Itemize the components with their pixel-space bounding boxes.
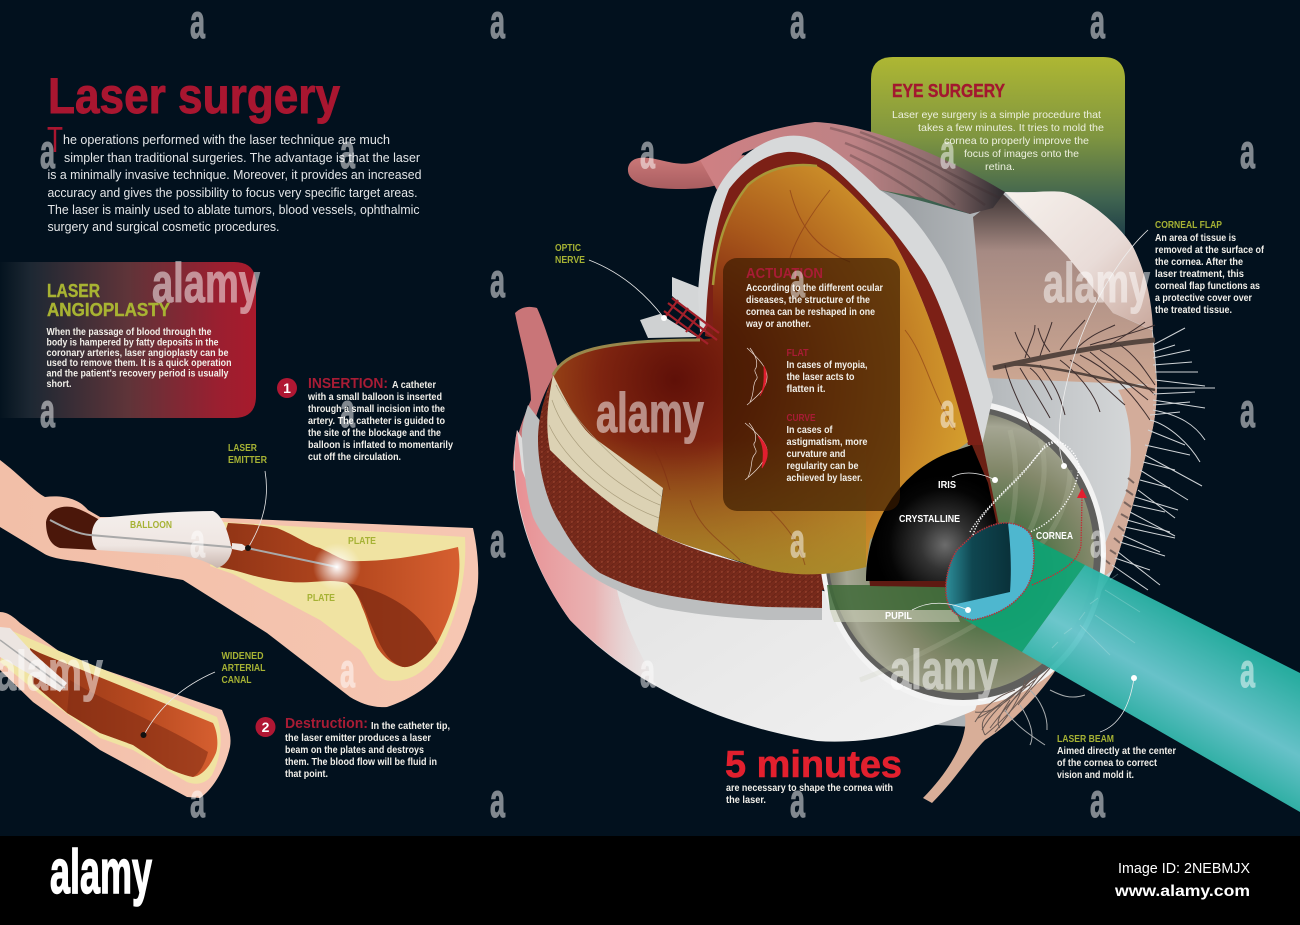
labels: iris, crystalline, cornea, pupil: CORNEA — [1036, 531, 1073, 542]
optic nerve fibres — [664, 298, 719, 344]
stock watermarks: a — [340, 126, 355, 179]
artery: blocked with balloon: PLATE — [307, 593, 335, 604]
step 1: insertion: A catheter — [392, 380, 436, 391]
stock watermarks: a — [40, 385, 55, 438]
step 1: insertion: 1 — [283, 380, 291, 396]
label: laser emitter: EMITTER — [228, 455, 268, 466]
intro text block: he operations performed with the laser technique are much — [63, 132, 390, 147]
stock watermarks: alamy — [1043, 251, 1150, 314]
label: corneal flap: laser treatment, this — [1155, 269, 1244, 280]
labels: iris, crystalline, cornea, pupil: CRYSTALLINE — [899, 514, 960, 525]
callout: 5 minutes — [725, 744, 902, 806]
step 1: insertion: the site of the blockage and the — [308, 428, 441, 439]
step 2: destruction: that point. — [285, 769, 328, 780]
stock watermarks: a — [340, 385, 355, 438]
step 1: insertion: artery. The catheter is guided to — [308, 416, 445, 427]
stock watermarks: a — [640, 645, 655, 698]
hairs through beam — [1052, 574, 1140, 655]
title: Laser surgery — [48, 68, 340, 124]
panel: eye surgery: EYE SURGERY — [892, 81, 1005, 101]
floor olive tint — [597, 440, 866, 574]
lid ticks — [1105, 478, 1134, 564]
label: laser beam — [1057, 675, 1176, 781]
laser beam inside eye — [960, 537, 1085, 652]
stock watermarks: a — [190, 515, 205, 568]
eye muscle lower strip — [513, 307, 558, 480]
choroid — [538, 375, 872, 608]
labels: iris, crystalline, cornea, pupil: IRIS — [938, 480, 956, 491]
stock watermarks: alamy — [596, 381, 704, 444]
panel: laser angioplasty: short. — [46, 379, 72, 390]
panel: eye surgery: takes a few minutes. It tries to mold the — [918, 122, 1104, 134]
panel: actuation: flatten it. — [786, 384, 826, 395]
intro text block: is a minimally invasive technique. Moreover, it provides an increased — [48, 167, 422, 182]
step 1: insertion: balloon is inflated to momentarily — [308, 440, 453, 451]
lower sclera — [514, 430, 1000, 742]
artery: blocked with balloon: BALLOON — [130, 520, 172, 531]
panel: actuation: CURVE — [786, 413, 816, 424]
cornea with dotted outline — [946, 523, 1034, 620]
label: laser emitter: LASER — [228, 443, 258, 454]
icon: flat cornea — [747, 348, 767, 405]
label: laser beam: of the cornea to correct — [1057, 758, 1158, 769]
step 1: insertion: with a small balloon is inserted — [307, 392, 442, 403]
step 1: insertion — [277, 375, 453, 463]
stock watermarks: a — [490, 775, 505, 828]
panel: actuation: In cases of myopia, — [786, 360, 868, 371]
optic nerve notch upper — [672, 277, 708, 326]
panel: actuation: curvature and — [786, 449, 846, 460]
label: widened arterial canal — [140, 651, 266, 738]
white cap — [1005, 191, 1153, 330]
panel: laser angioplasty — [0, 262, 256, 418]
iris green band — [827, 585, 960, 610]
panel: laser angioplasty: ANGIOPLASTY — [47, 300, 170, 320]
stock watermarks: a — [940, 385, 955, 438]
retina interior — [553, 165, 968, 574]
label: widened arterial canal: CANAL — [222, 675, 252, 686]
white cut band upper — [698, 136, 993, 445]
step 2: destruction: 2 — [262, 719, 270, 735]
panel: eye surgery: focus of images onto the — [964, 148, 1079, 160]
right eyelashes — [1112, 328, 1215, 590]
cream lines — [549, 385, 662, 518]
cream sclera layers — [547, 375, 663, 533]
callout: 5 minutes: 5 minutes — [725, 744, 902, 786]
stock watermarks: a — [490, 255, 505, 308]
label: optic nerve — [555, 243, 667, 321]
label: corneal flap: corneal flap functions as — [1155, 281, 1260, 292]
step 1: insertion: cut off the circulation. — [308, 452, 401, 463]
eye muscle tendon top — [628, 155, 745, 189]
step 2: destruction: them. The blood flow will be fluid in — [285, 757, 437, 768]
stock watermarks: a — [1090, 515, 1105, 568]
step 1: insertion: through a small incision into the — [308, 404, 445, 415]
panel: actuation: regularity can be — [786, 461, 859, 472]
iris fibres — [860, 430, 1070, 680]
panel: actuation: ACTUATION — [746, 266, 823, 282]
arrow: red dashed movement — [1032, 488, 1087, 585]
panel: eye surgery — [871, 57, 1125, 235]
iris pale band — [830, 610, 960, 622]
panel: actuation: FLAT — [786, 348, 808, 359]
footer bar — [0, 836, 1300, 925]
step 2: destruction: the laser emitter produces a laser — [285, 733, 431, 744]
step 1: insertion: INSERTION: — [308, 375, 388, 392]
stock watermarks: a — [940, 126, 955, 179]
callout: 5 minutes: the laser. — [726, 795, 766, 806]
panel: actuation: cornea can be reshaped in one — [746, 307, 875, 318]
label: widened arterial canal: ARTERIAL — [222, 663, 266, 674]
intro text block: surgery and surgical cosmetic procedures. — [48, 219, 280, 234]
step 2: destruction — [256, 715, 450, 780]
step 2: destruction: beam on the plates and destroys — [285, 745, 424, 756]
panel: laser angioplasty: used to remove them. It is a quick operation — [46, 358, 232, 369]
panel: eye surgery: retina. — [985, 161, 1015, 173]
optic nerve notch lower — [640, 314, 697, 338]
artery: blocked with balloon: PLATE — [348, 536, 376, 547]
panel: laser angioplasty: LASER — [47, 281, 100, 301]
stock watermarks: a — [1240, 645, 1255, 698]
right lid strip — [1085, 383, 1157, 590]
footer bar: Image ID: 2NEBMJX — [1118, 860, 1250, 877]
stock watermarks: a — [790, 775, 805, 828]
stock watermarks: a — [1240, 385, 1255, 438]
iris — [820, 400, 1106, 706]
callout: 5 minutes: are necessary to shape the cornea with — [726, 783, 893, 794]
stock watermarks: a — [790, 515, 805, 568]
stock watermarks: alamy — [890, 638, 998, 701]
eye anatomy illustration — [513, 122, 1157, 803]
label: corneal flap: CORNEAL FLAP — [1155, 220, 1222, 231]
stock watermarks: a — [190, 775, 205, 828]
panel: actuation: In cases of — [786, 425, 833, 436]
panel: laser angioplasty: When the passage of blood through the — [46, 327, 212, 338]
label: optic nerve: NERVE — [555, 255, 585, 266]
label: corneal flap: An area of tissue is — [1155, 233, 1236, 244]
laser beam outside — [1022, 565, 1300, 812]
panel: eye surgery: cornea to properly improve the — [944, 135, 1089, 147]
stock watermarks: a — [40, 126, 55, 179]
intro text block: T — [47, 119, 63, 160]
stock watermarks: a — [790, 255, 805, 308]
intro text block: accuracy and gives the possibility to focus very specific target areas. — [48, 185, 418, 200]
iris ring — [825, 406, 1101, 700]
grey band — [522, 405, 822, 620]
muscle ribs — [830, 126, 977, 206]
stock watermarks: a — [340, 645, 355, 698]
label: corneal flap: the cornea. After the — [1155, 257, 1243, 268]
veins — [610, 190, 955, 565]
artery: widened canal — [0, 612, 231, 798]
stock watermarks: a — [1240, 126, 1255, 179]
stock watermarks: a — [640, 126, 655, 179]
panel: laser angioplasty: coronary arteries, laser angioplasty can be — [46, 348, 229, 359]
label: widened arterial canal: WIDENED — [222, 651, 264, 662]
iris disc — [828, 411, 1094, 693]
upper inner rim — [713, 165, 817, 285]
pink muscle fade — [515, 430, 660, 690]
panel: actuation: diseases, the structure of the — [746, 295, 870, 306]
label: laser beam: LASER BEAM — [1057, 734, 1114, 745]
panel: laser angioplasty: body is hampered by fatty deposits in the — [46, 338, 219, 348]
lens band — [868, 566, 995, 588]
intro text block: simpler than traditional surgeries. The advantage is that the laser — [64, 150, 421, 165]
dark red band upper — [705, 152, 983, 445]
panel: eye surgery: Laser eye surgery is a simple procedure that — [892, 109, 1101, 121]
stock watermarks: a — [490, 515, 505, 568]
label: laser emitter — [228, 443, 268, 551]
stock watermarks: alamy — [152, 251, 260, 314]
label: corneal flap — [1059, 220, 1265, 469]
upper rim of lower cup — [553, 340, 700, 375]
intro text block — [47, 119, 422, 234]
upper muscle band — [700, 122, 1005, 214]
step 2: destruction: Destruction: — [285, 715, 368, 732]
label: laser beam: Aimed directly at the center — [1057, 746, 1176, 757]
stock watermarks: a — [1090, 775, 1105, 828]
label: optic nerve: OPTIC — [555, 243, 581, 254]
artery: blocked with balloon — [0, 460, 478, 707]
panel: actuation: way or another. — [745, 319, 811, 330]
label: corneal flap: removed at the surface of — [1155, 245, 1265, 256]
label: corneal flap: a protective cover over — [1155, 293, 1252, 304]
upper lid skin — [973, 194, 1157, 385]
step 2: destruction: In the catheter tip, — [371, 721, 450, 732]
panel: actuation: According to the different ocular — [746, 283, 883, 294]
label: corneal flap: the treated tissue. — [1155, 305, 1232, 316]
crystalline lens — [866, 445, 998, 581]
label: laser beam: vision and mold it. — [1057, 770, 1134, 781]
panel: actuation: achieved by laser. — [786, 473, 863, 484]
panel: laser angioplasty: and the patient's recovery period is usually — [46, 368, 229, 380]
panel: actuation — [723, 258, 900, 511]
outer globe and eyelid — [850, 190, 1157, 727]
dotted flap outline — [970, 442, 1079, 535]
labels: iris, crystalline, cornea, pupil — [885, 473, 1073, 622]
lower eyelashes — [975, 665, 1085, 745]
intro text block: The laser is mainly used to ablate tumors, blood vessels, ophthalmic — [48, 202, 420, 217]
panel: actuation: astigmatism, more — [786, 437, 868, 448]
lower lid with tip — [923, 657, 1057, 803]
panel: actuation: the laser acts to — [786, 372, 854, 383]
icon: curved cornea — [745, 423, 767, 480]
upper eyelashes — [993, 320, 1155, 430]
footer bar: www.alamy.com — [1114, 883, 1250, 900]
labels: iris, crystalline, cornea, pupil: PUPIL — [885, 611, 912, 622]
footer bar: alamy — [50, 838, 152, 907]
